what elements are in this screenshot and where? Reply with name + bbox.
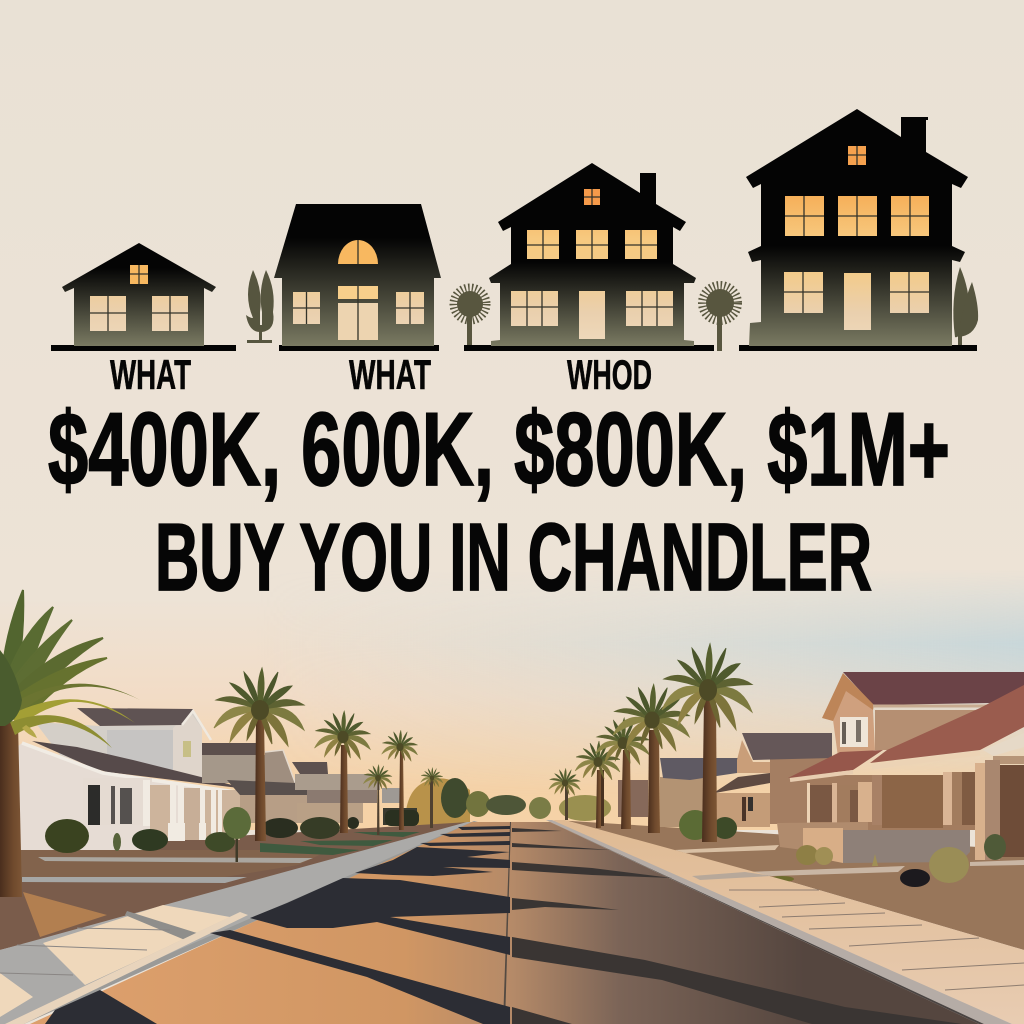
background sky (0, 588, 1024, 830)
shrubs left (45, 807, 419, 862)
left white house (17, 708, 247, 850)
mid-left tan houses (202, 743, 417, 825)
right curb (546, 820, 1012, 1024)
ground: base yards (0, 820, 1024, 950)
small label: whod: WHOD (567, 351, 652, 398)
house silhouette: luxury home (739, 109, 977, 351)
horizon treeline (405, 778, 611, 825)
house silhouette: two-bay home (274, 204, 441, 351)
road (30, 822, 979, 1024)
right yard detail (675, 834, 1024, 887)
left distant palms (214, 668, 443, 841)
large terracotta house right (777, 672, 1024, 863)
foreground palm left (0, 590, 140, 897)
right distant houses (618, 733, 832, 840)
road shadows: right lane (512, 828, 962, 1024)
icon: palm silhouette middle right (703, 286, 737, 351)
house silhouette: large two-storey home (464, 163, 714, 351)
right sidewalk (548, 820, 1024, 1024)
house silhouette: starter home (51, 243, 236, 351)
small label: what second: WHAT (349, 351, 431, 398)
left curb (5, 821, 478, 1024)
icon: tree silhouette right (953, 267, 978, 346)
street scene (0, 590, 1024, 1024)
road shadows: left lane (45, 826, 510, 1024)
icon: leafy tree silhouette (246, 270, 274, 343)
icon: palm silhouette middle left (454, 288, 486, 345)
road centre seam (503, 822, 511, 1024)
left sidewalk (0, 822, 478, 1024)
small label: what: WHAT (110, 351, 191, 398)
left yard detail (20, 832, 420, 937)
right distant palms (549, 644, 752, 842)
